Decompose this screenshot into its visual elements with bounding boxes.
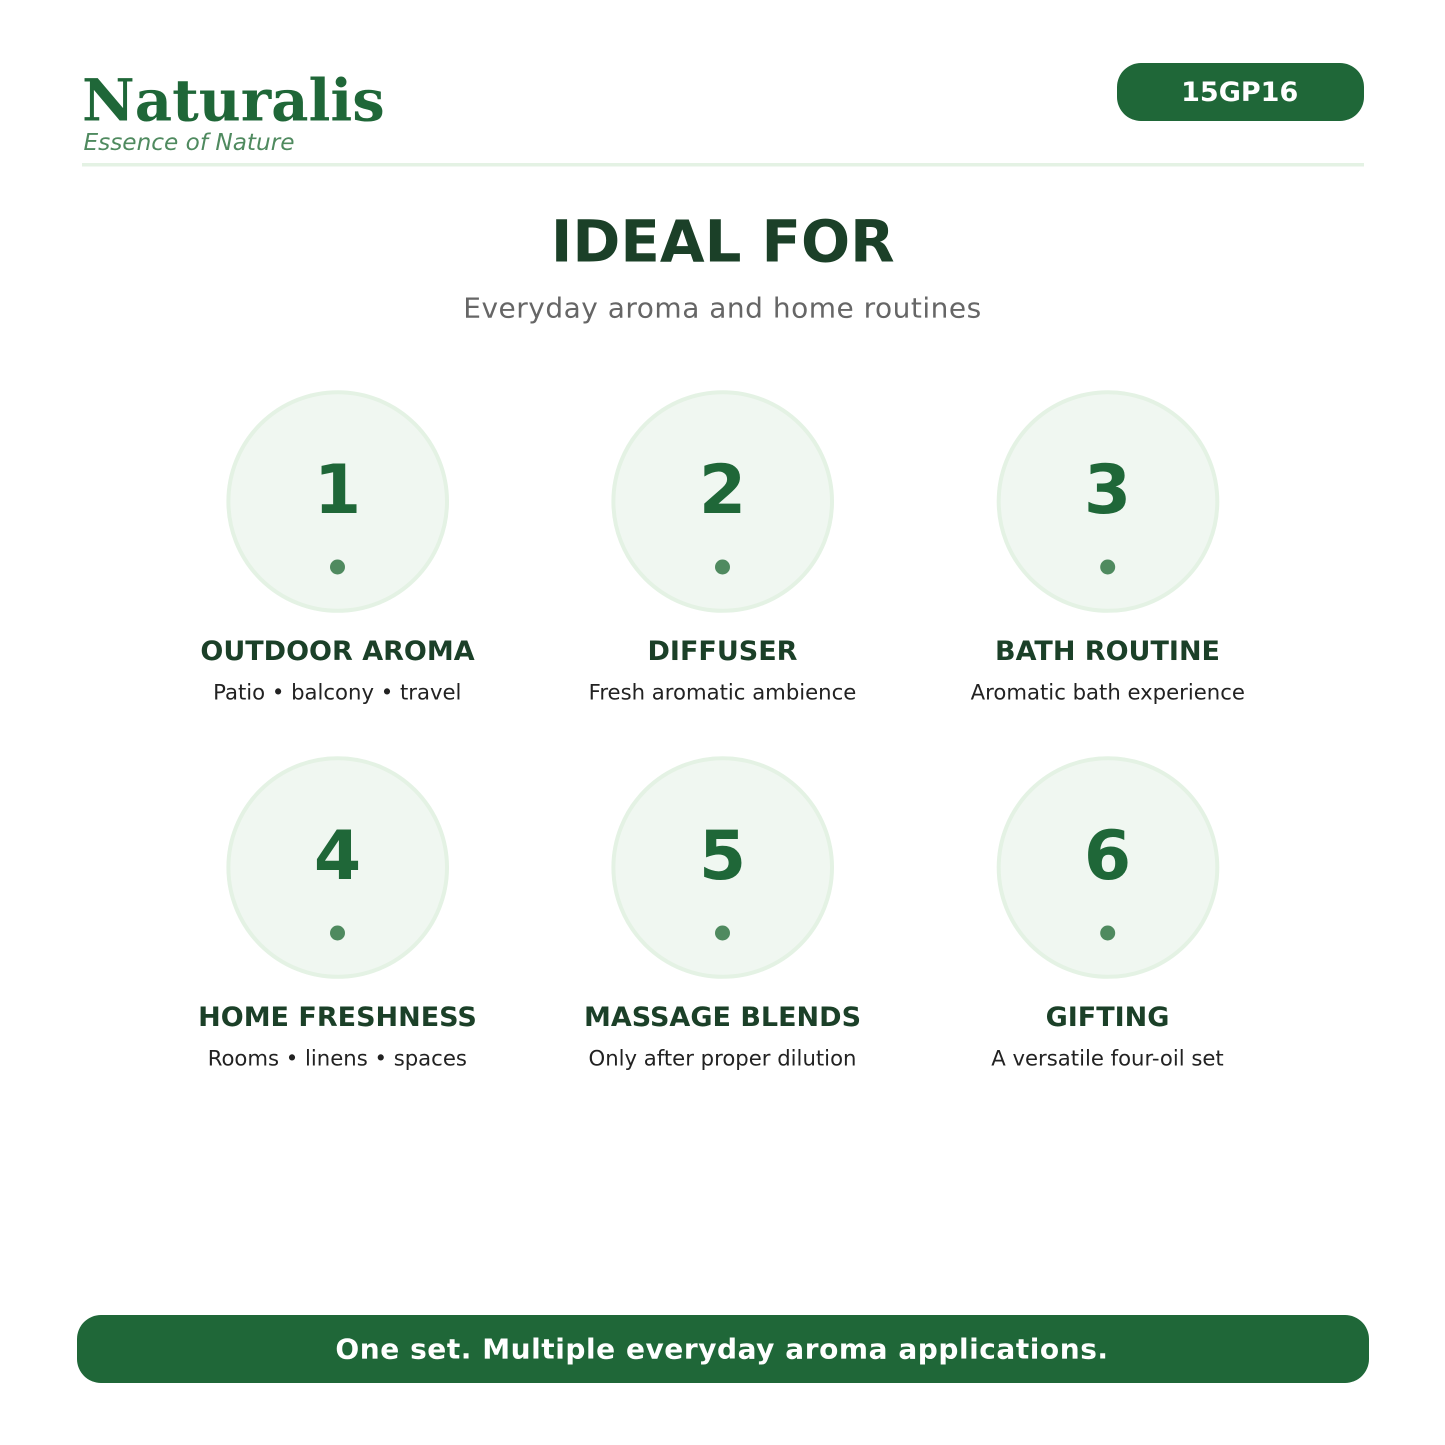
header [82, 63, 1364, 156]
item 3: bath routine: 3 [1084, 451, 1131, 530]
item 6: gifting: 6 [1084, 817, 1131, 896]
item 4: home freshness: HOME FRESHNESS [198, 1002, 477, 1033]
brand tagline: Essence of Nature [84, 129, 295, 156]
item 6: gifting [991, 758, 1224, 1071]
item 5: massage blends: MASSAGE BLENDS [584, 1002, 861, 1033]
item 3: bath routine [971, 392, 1245, 705]
item 1: outdoor aroma: Patio • balcony • travel [213, 680, 461, 705]
item 5: massage blends [584, 758, 861, 1071]
footer banner [77, 1315, 1369, 1383]
item 1: outdoor aroma: OUTDOOR AROMA [200, 636, 475, 667]
item 5: massage blends: 5 [699, 817, 746, 896]
item 2: diffuser: DIFFUSER [648, 636, 798, 667]
item 4: home freshness: 4 [314, 817, 361, 896]
item 2: diffuser: Fresh aromatic ambience [589, 680, 856, 705]
subtitle: Everyday aroma and home routines [463, 292, 982, 324]
item 5: massage blends: Only after proper dilution [589, 1046, 856, 1071]
item 3: bath routine: BATH ROUTINE [995, 636, 1220, 667]
item 6: gifting: GIFTING [1046, 1002, 1169, 1033]
item 1: outdoor aroma [200, 392, 475, 705]
item 4: home freshness [198, 758, 477, 1071]
item 6: gifting: A versatile four-oil set [991, 1046, 1224, 1071]
product code badge [1117, 63, 1364, 121]
item 3: bath routine: Aromatic bath experience [971, 680, 1245, 705]
footer banner: One set. Multiple everyday aroma applications. [335, 1332, 1109, 1366]
brand name: Naturalis [82, 66, 385, 134]
item 4: home freshness: Rooms • linens • spaces [208, 1046, 467, 1071]
product code badge: 15GP16 [1181, 77, 1298, 108]
item 2: diffuser: 2 [699, 451, 746, 530]
main title: IDEAL FOR [551, 208, 895, 276]
item 2: diffuser [589, 392, 856, 705]
item 1: outdoor aroma: 1 [314, 451, 361, 530]
